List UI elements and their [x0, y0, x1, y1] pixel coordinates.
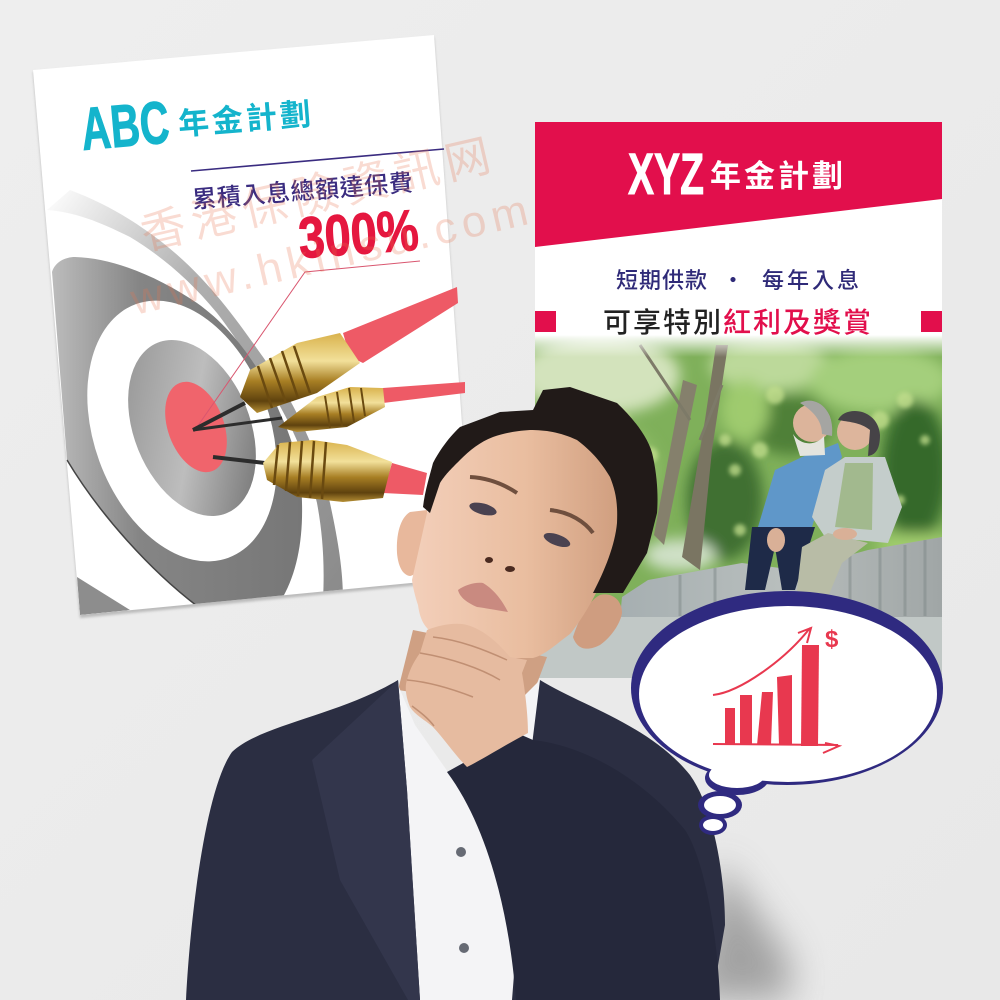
neck: [398, 630, 547, 710]
shirt buttons: [456, 847, 466, 857]
jacket right: [512, 680, 725, 1000]
face: [412, 418, 622, 658]
text block: special bonus: 可享特別紅利及獎賞: [603, 307, 873, 338]
elderly woman: [797, 411, 902, 597]
text block: short-term payment: ・: [722, 268, 744, 293]
text block: short-term payment: 短期供款: [616, 268, 708, 293]
mouth: [458, 583, 508, 612]
ear left: [397, 510, 428, 576]
watermark: 香港保險資訊网: [136, 128, 502, 260]
main bubble: [631, 591, 943, 795]
elderly man: [745, 401, 842, 590]
stone wall lower: [535, 617, 942, 678]
bars: [725, 645, 819, 746]
red bullseye: [165, 382, 227, 472]
tree trunks: [640, 345, 728, 570]
dart 1: [193, 287, 458, 430]
nostrils: [485, 557, 493, 563]
raised arm: [447, 733, 720, 1000]
text block: short-term payment: 每年入息: [762, 268, 862, 293]
red side marker right: [921, 311, 942, 332]
callout: 300%: 300%: [296, 198, 421, 271]
heading: ABC plan name: 年金計劃: [177, 96, 315, 142]
red header banner: [535, 122, 942, 247]
panel: ABC annuity plan card: [33, 35, 473, 618]
stone wall upper: [620, 537, 942, 618]
heading: ABC: ABC: [78, 89, 172, 163]
white fade over photo: [535, 335, 942, 357]
brows: [470, 477, 517, 493]
shadow behind man: [690, 860, 790, 1000]
shirt: [396, 680, 540, 1000]
small bubble: [699, 815, 727, 835]
dollar sign: $: [825, 626, 839, 653]
foliage speckles: [628, 386, 932, 538]
callout: thought bubble: [631, 591, 943, 835]
second grey ring: [52, 257, 302, 606]
icon: rising bar chart: [713, 626, 839, 753]
baseline arrow: [713, 743, 839, 753]
dart 2: [193, 382, 465, 432]
panel: XYZ annuity plan card: [520, 122, 955, 678]
icon: darts: [193, 287, 465, 502]
corner grey: [77, 577, 130, 615]
heading: XYZ plan name: 年金計劃: [710, 159, 846, 194]
divider line top: [191, 149, 444, 171]
outer ring band: [47, 190, 343, 600]
inner grey ring: [128, 340, 256, 516]
left lapel: [312, 680, 420, 1000]
photo: couple in park: [520, 335, 955, 678]
red side marker left: [535, 311, 556, 332]
watermark: www.hkinsu.com: [125, 184, 538, 325]
figure: thinking man: [186, 387, 725, 1000]
finger lines: [407, 637, 507, 726]
pointer line: [197, 261, 420, 427]
rising arrow: [713, 628, 811, 695]
hair: [423, 387, 658, 593]
dark edge of ring: [67, 460, 197, 606]
icon: dartboard target: [47, 190, 343, 615]
white ring: [87, 300, 276, 562]
text block: cumulative interest: 累積入息總額達保費: [191, 170, 414, 214]
dart 3: [213, 440, 427, 502]
hand: [406, 624, 528, 767]
ear right: [573, 594, 622, 649]
jacket left: [186, 680, 420, 1000]
heading: XYZ: XYZ: [628, 142, 704, 207]
eyes: [468, 500, 498, 518]
medium bubble: [698, 791, 742, 819]
